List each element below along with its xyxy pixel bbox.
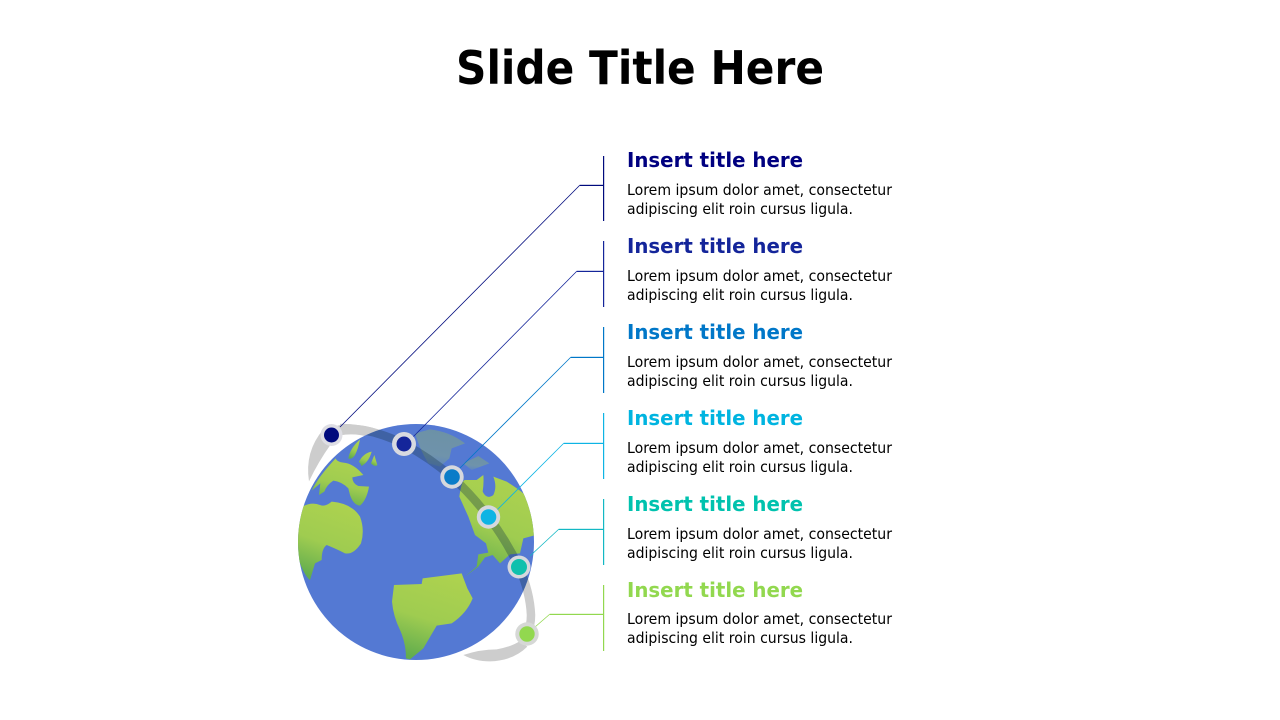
text block 4: Insert title here [627, 406, 803, 430]
connector 1 [340, 156, 604, 427]
connector 4 [497, 413, 604, 510]
text block 3: Insert title here [627, 320, 803, 344]
marker 2 [392, 432, 416, 456]
text block 4: adipiscing elit roin cursus ligula. [627, 458, 853, 476]
text block 5: Insert title here [627, 492, 803, 516]
text block 2: Insert title here [627, 234, 803, 258]
title: Slide Title Here [456, 41, 824, 95]
text block 1: Insert title here [627, 148, 803, 172]
text block 6: adipiscing elit roin cursus ligula. [627, 629, 853, 647]
text block 1: adipiscing elit roin cursus ligula. [627, 200, 853, 218]
text block 5 [627, 492, 893, 562]
text block 4 [627, 406, 893, 476]
continents [297, 428, 536, 659]
text block 1: Lorem ipsum dolor amet, consectetur [627, 181, 893, 199]
text block 5: Lorem ipsum dolor amet, consectetur [627, 525, 893, 543]
marker 4 [477, 505, 500, 529]
text block 3: adipiscing elit roin cursus ligula. [627, 372, 853, 390]
text block 6: Insert title here [627, 578, 803, 602]
marker 1 [320, 424, 342, 446]
marker 6 [515, 622, 539, 646]
text block 2: Lorem ipsum dolor amet, consectetur [627, 267, 893, 285]
connector 5 [530, 499, 604, 565]
text block 1 [627, 148, 893, 218]
connector 6 [535, 585, 604, 651]
marker 3 [440, 465, 464, 489]
text block 4: Lorem ipsum dolor amet, consectetur [627, 439, 893, 457]
orbit ring behind globe [308, 424, 531, 661]
text block 3: Lorem ipsum dolor amet, consectetur [627, 353, 893, 371]
marker 5 [508, 556, 530, 578]
text block 2 [627, 234, 893, 304]
connector 2 [412, 241, 604, 438]
text block 3 [627, 320, 893, 390]
earth disc [298, 424, 534, 660]
connector 3 [460, 327, 604, 468]
text block 5: adipiscing elit roin cursus ligula. [627, 544, 853, 562]
text block 6: Lorem ipsum dolor amet, consectetur [627, 610, 893, 628]
globe illustration [297, 424, 536, 661]
text block 2: adipiscing elit roin cursus ligula. [627, 286, 853, 304]
text block 6 [627, 578, 893, 647]
